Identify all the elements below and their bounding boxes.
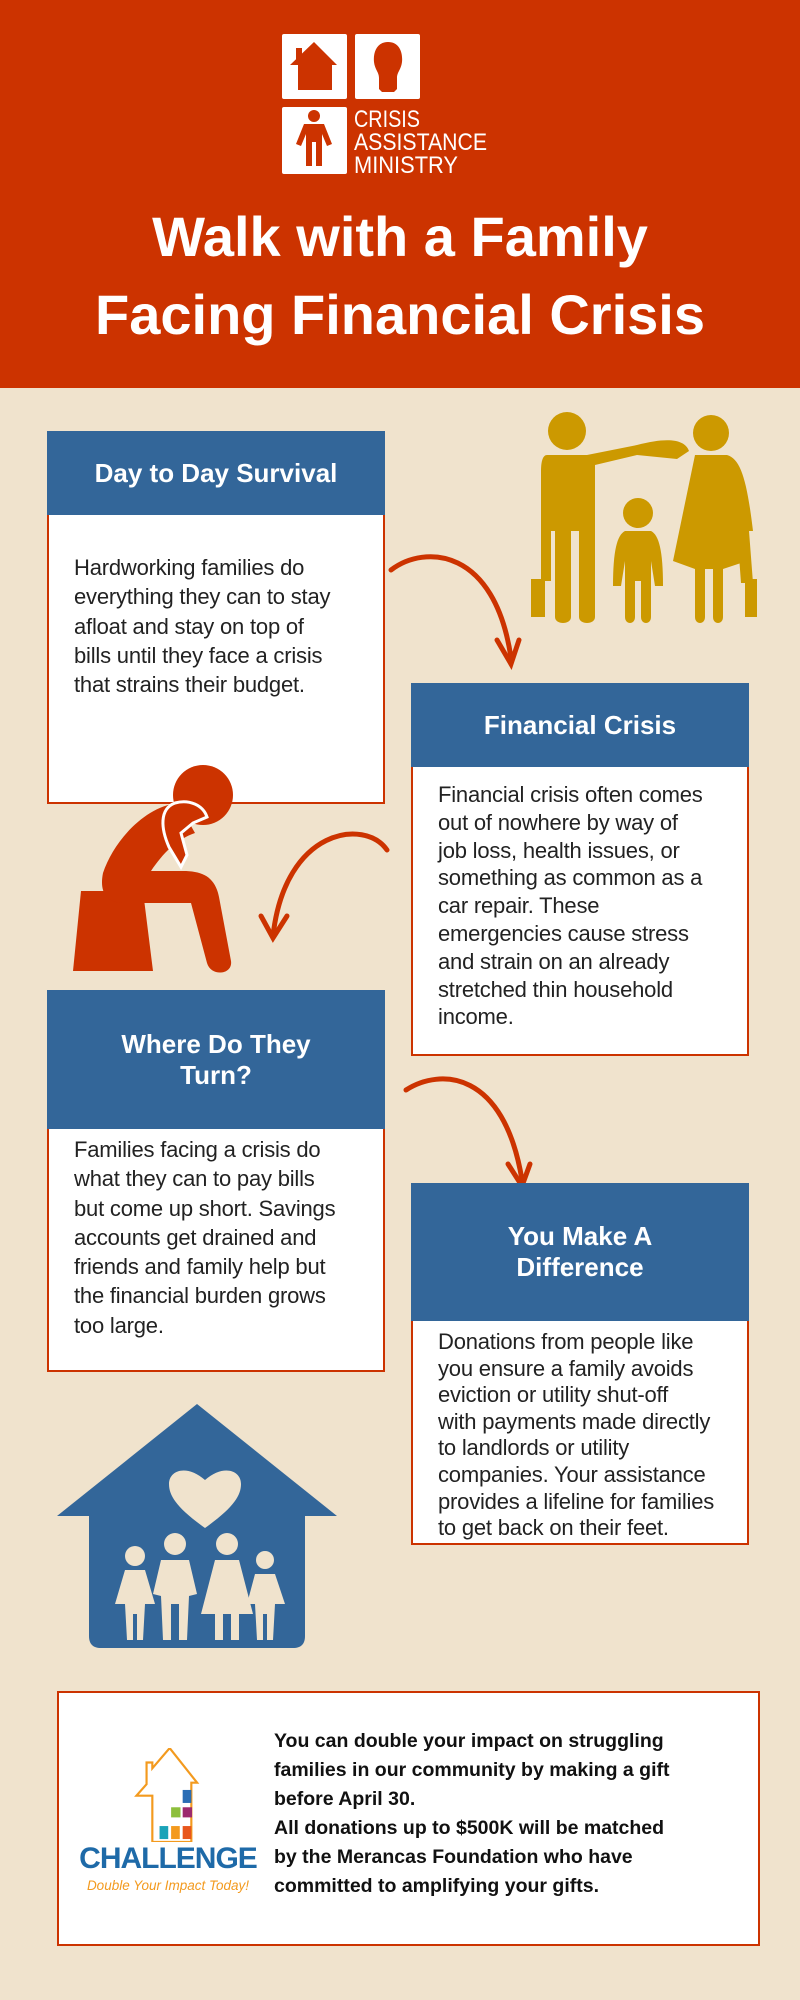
heading: Where Do They bbox=[121, 1028, 311, 1058]
heading: You Make A bbox=[508, 1221, 652, 1251]
icon: stressed person bbox=[73, 765, 233, 972]
text: families in our community by making a gift bbox=[274, 1759, 669, 1781]
text: car repair. These bbox=[438, 893, 599, 918]
text: something as common as a bbox=[438, 865, 702, 890]
text: CHALLENGE: CHALLENGE bbox=[79, 1842, 257, 1875]
text: you ensure a family avoids bbox=[438, 1356, 693, 1381]
text: out of nowhere by way of bbox=[438, 810, 678, 835]
heading: Day to Day Survival bbox=[95, 458, 337, 488]
text: Donations from people like bbox=[438, 1329, 693, 1354]
text: emergencies cause stress bbox=[438, 921, 689, 946]
text: Hardworking families do bbox=[74, 555, 304, 580]
text: stretched thin household bbox=[438, 977, 673, 1002]
text: provides a lifeline for families bbox=[438, 1489, 714, 1514]
text: before April 30. bbox=[274, 1788, 415, 1810]
text: bills until they face a crisis bbox=[74, 643, 322, 668]
header band bbox=[0, 0, 800, 388]
text: accounts get drained and bbox=[74, 1225, 316, 1250]
icon: family bbox=[531, 412, 757, 623]
title: Facing Financial Crisis bbox=[95, 283, 705, 346]
logo: CRISIS bbox=[354, 106, 420, 133]
heading: Financial Crisis bbox=[484, 710, 676, 740]
heading: Turn? bbox=[180, 1060, 252, 1090]
text: job loss, health issues, or bbox=[438, 838, 680, 863]
arrow 3 bbox=[404, 1076, 532, 1183]
heading: Difference bbox=[516, 1252, 644, 1282]
text: the financial burden grows bbox=[74, 1283, 326, 1308]
text: companies. Your assistance bbox=[438, 1462, 706, 1487]
text: what they can to pay bills bbox=[74, 1166, 315, 1191]
text: friends and family help but bbox=[74, 1254, 325, 1279]
text bbox=[274, 1730, 670, 1897]
title bbox=[95, 205, 705, 346]
icon: house with family bbox=[57, 1404, 337, 1648]
text bbox=[74, 1137, 335, 1338]
arrow 2 bbox=[258, 832, 390, 943]
text: eviction or utility shut-off bbox=[438, 1382, 668, 1407]
text: to get back on their feet. bbox=[438, 1515, 669, 1540]
box: you make a difference bbox=[411, 1183, 749, 1545]
text: everything they can to stay bbox=[74, 584, 330, 609]
text: All donations up to $500K will be matched bbox=[274, 1817, 664, 1839]
text bbox=[74, 555, 330, 697]
text: too large. bbox=[74, 1313, 164, 1338]
text: by the Merancas Foundation who have bbox=[274, 1846, 633, 1868]
text: committed to amplifying your gifts. bbox=[274, 1875, 599, 1897]
text bbox=[437, 782, 703, 1029]
logo bbox=[282, 34, 487, 174]
text: and strain on an already bbox=[438, 949, 669, 974]
icon: challenge logo bbox=[134, 1748, 200, 1842]
box: day to day survival bbox=[47, 431, 385, 804]
heading bbox=[411, 683, 749, 767]
arrow 1 bbox=[388, 554, 522, 670]
text: but come up short. Savings bbox=[74, 1196, 335, 1221]
heading bbox=[411, 1183, 749, 1321]
text: You can double your impact on struggling bbox=[274, 1730, 664, 1752]
box: financial crisis bbox=[411, 683, 749, 1056]
text: with payments made directly bbox=[438, 1409, 710, 1434]
text: afloat and stay on top of bbox=[74, 614, 304, 639]
text: tagline: Double Your Impact Today! bbox=[87, 1878, 249, 1893]
box: where do they turn bbox=[47, 990, 385, 1372]
text: Financial crisis often comes bbox=[438, 782, 703, 807]
panel: challenge bbox=[57, 1691, 760, 1946]
text bbox=[438, 1329, 714, 1540]
heading bbox=[47, 990, 385, 1129]
heading bbox=[47, 431, 385, 515]
text: to landlords or utility bbox=[438, 1435, 629, 1460]
title: Walk with a Family bbox=[152, 205, 648, 268]
text: income. bbox=[438, 1004, 514, 1029]
text: Families facing a crisis do bbox=[74, 1137, 320, 1162]
text: that strains their budget. bbox=[74, 672, 305, 697]
